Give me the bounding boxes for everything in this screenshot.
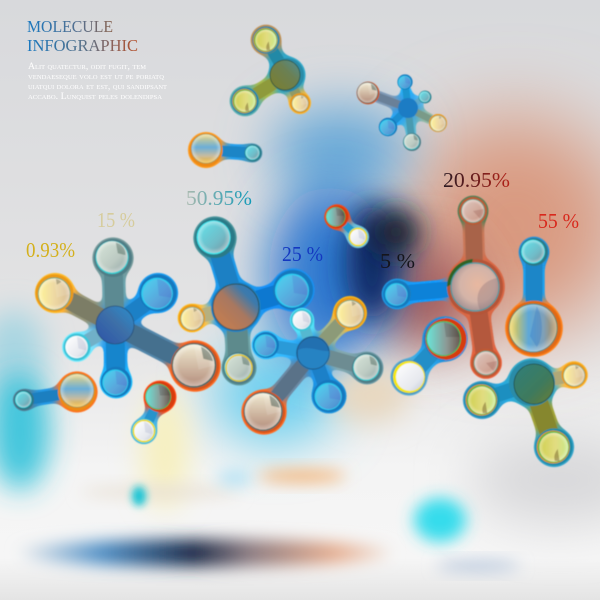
- percentage labels: 50.95%: [186, 186, 252, 210]
- molecule: central star: [243, 297, 382, 433]
- intro text: [28, 61, 167, 101]
- molecule: large left star: [35, 239, 219, 397]
- molecule: top right star: [357, 74, 447, 151]
- intro text: Alit quatectur, odit fugit, tem: [28, 61, 147, 71]
- title: INFOGRAPHIC: [27, 36, 138, 55]
- molecule: small red and white: [326, 206, 368, 247]
- molecule: right dumbbell: [507, 238, 561, 355]
- percentage labels: 25 %: [282, 242, 323, 266]
- molecule: bottom left dumbbell: [14, 373, 96, 411]
- molecule: central four arm: [179, 218, 313, 384]
- intro text: vendaeseque volo est ut pe poriatq: [28, 71, 165, 81]
- title: MOLECULE: [27, 17, 113, 36]
- percentage labels: 20.95%: [443, 168, 510, 192]
- percentage labels: 5 %: [380, 249, 415, 273]
- percentage labels: [26, 168, 579, 273]
- intro text: accabo. Lunquist peles dolendipsa: [28, 91, 163, 101]
- molecule: lower right green: [464, 360, 586, 466]
- molecule: top dumbbell: [189, 133, 262, 167]
- percentage labels: 0.93%: [26, 238, 75, 262]
- molecule: small red and yellow: [132, 382, 175, 443]
- intro text: uiatqui dolora et est, qui sandipsant: [28, 81, 167, 91]
- molecule: right rust: [383, 197, 503, 378]
- percentage labels: 15 %: [97, 208, 135, 232]
- title: [27, 17, 138, 55]
- molecule: top olive: [231, 26, 310, 115]
- percentage labels: 55 %: [538, 209, 579, 233]
- molecule: red and yellow dumbbell: [392, 318, 467, 394]
